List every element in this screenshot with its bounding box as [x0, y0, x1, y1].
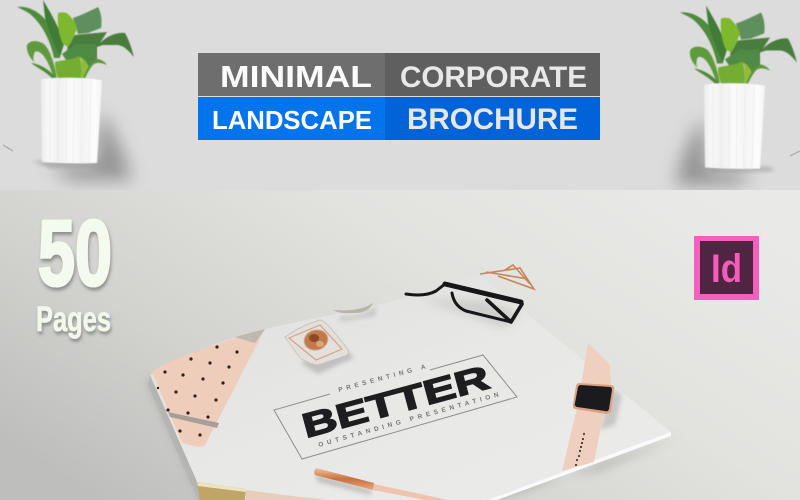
title word: CORPORATE: CORPORATE — [400, 61, 587, 94]
cutout dots — [157, 345, 239, 437]
gold clip — [197, 482, 246, 500]
brochure page — [150, 274, 671, 500]
title word: BROCHURE: BROCHURE — [407, 103, 578, 136]
BETTER: BETTER — [298, 359, 493, 446]
icon: InDesign: Id — [711, 247, 742, 291]
background: top band — [0, 0, 800, 191]
title word: LANDSCAPE: LANDSCAPE — [212, 105, 372, 135]
plant: right — [680, 6, 797, 169]
right pot shadow — [675, 118, 774, 185]
cover title block — [274, 355, 517, 459]
brochure shadow — [146, 378, 680, 500]
cutout grey tip — [235, 329, 265, 343]
banner cell: landscape — [198, 97, 385, 140]
page count label: Pages: Pages — [36, 300, 111, 339]
pot shadows — [32, 112, 774, 185]
strap holes — [575, 433, 585, 466]
left pot shadow — [32, 112, 132, 180]
PRESENTING A: PRESENTING A — [338, 364, 427, 394]
smart watch — [562, 343, 622, 471]
title word: MINIMAL: MINIMAL — [220, 59, 372, 94]
watch body — [573, 383, 614, 414]
eyeglasses — [406, 284, 522, 328]
glass jar with copper clips — [285, 320, 354, 374]
bottom cover strip — [246, 490, 330, 500]
silver clip — [333, 303, 376, 322]
cutout stripe — [168, 412, 219, 428]
left edge shading — [148, 375, 205, 500]
pink cover cutout — [152, 329, 265, 447]
banner cell: corporate — [385, 53, 600, 96]
paperclips — [480, 265, 534, 289]
stray stem mark left — [3, 145, 13, 151]
glasses shadow — [420, 300, 520, 328]
watch shadow — [600, 388, 622, 430]
title banner — [198, 53, 600, 140]
watch screen — [575, 385, 612, 411]
background: lower band — [0, 190, 800, 500]
banner cell: minimal — [198, 53, 385, 96]
banner cell: brochure — [385, 97, 600, 140]
copper pen — [314, 468, 448, 500]
brochure mockup — [146, 265, 680, 500]
stray stem mark right — [790, 151, 800, 156]
icon: InDesign — [694, 236, 759, 300]
OUTSTANDING PRESENTATION: OUTSTANDING PRESENTATION — [318, 392, 500, 449]
title frame — [274, 355, 517, 459]
watch strap — [581, 343, 611, 388]
page count: 50: 50 — [38, 201, 112, 305]
plant: left — [17, 0, 134, 163]
page edge — [487, 432, 671, 500]
glasses frame — [406, 284, 522, 322]
